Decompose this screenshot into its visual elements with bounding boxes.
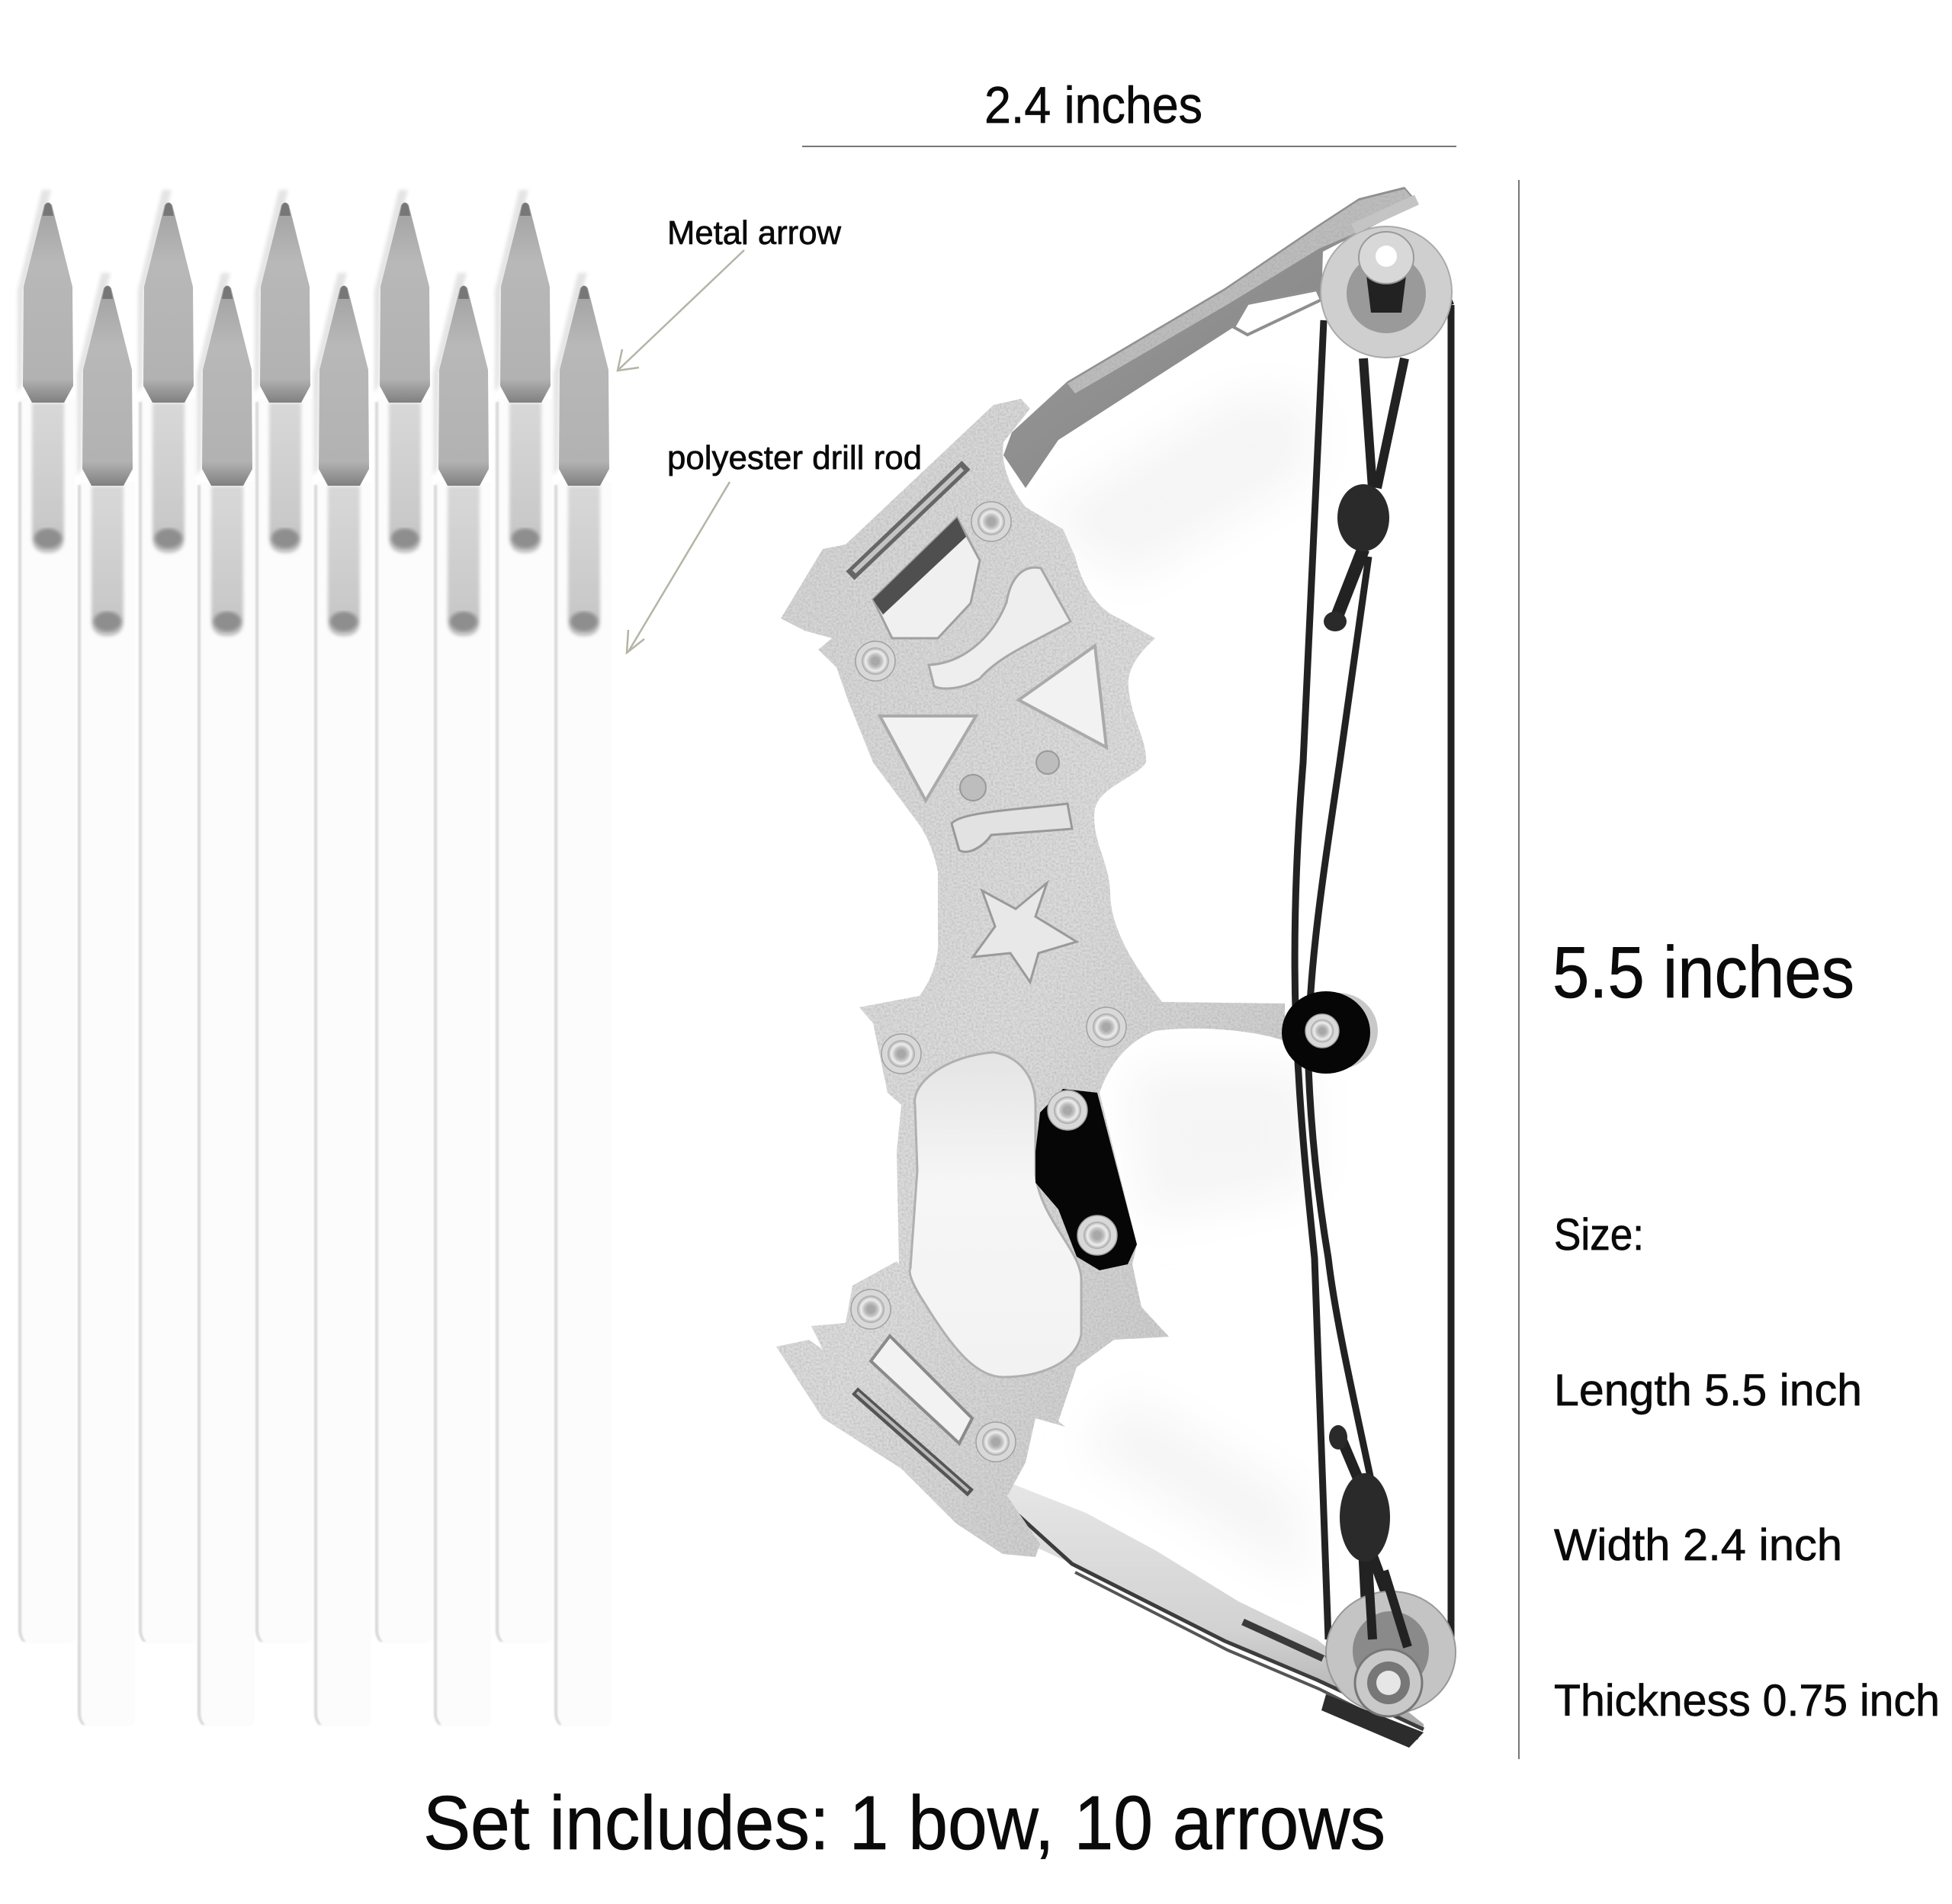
size specification list: Length 5.5 inch [1554, 1366, 1862, 1415]
cable guard arm end: silver disc [1299, 993, 1378, 1069]
top pulley [1321, 200, 1452, 358]
mini compound bow [776, 187, 1456, 1748]
label: polyester drill rod: polyester drill rod [667, 439, 922, 477]
lower limb [1006, 1483, 1424, 1748]
lower groove [855, 1391, 971, 1493]
set contents caption: Set includes: 1 bow, 10 arrows [423, 1780, 1385, 1866]
cable guard: black disc [1282, 991, 1370, 1074]
bottom pulley [1326, 1563, 1456, 1716]
cable guard bolt [1305, 1014, 1339, 1048]
label: metal arrow: Metal arrow [667, 214, 841, 252]
star cutout [973, 883, 1077, 982]
strings [1295, 305, 1451, 1642]
string knots [1324, 484, 1390, 1562]
size specification list: Thickness 0.75 inch [1554, 1676, 1940, 1726]
bar slot [952, 804, 1072, 852]
callout arrow: polyester drill rod [627, 482, 730, 653]
arrow set: ten arrows [18, 190, 612, 1726]
size specification list: Width 2.4 inch [1554, 1520, 1842, 1570]
upper slot [873, 518, 980, 638]
callout arrow: metal arrow [618, 250, 744, 371]
height dimension line [1518, 180, 1520, 1759]
back row arrows [18, 190, 553, 1643]
soft paper shading [1037, 397, 1312, 1586]
size specification list: Size: [1554, 1210, 1644, 1260]
upper groove [850, 465, 966, 576]
curved opening [929, 567, 1071, 689]
size specification list [1554, 1210, 1940, 1726]
left triangle opening [880, 716, 976, 801]
grip opening [910, 1052, 1081, 1377]
front row arrows [77, 273, 612, 1726]
upper limb [1003, 187, 1418, 488]
lower slot [871, 1336, 972, 1443]
width dimension line [802, 146, 1456, 147]
right triangle opening [1019, 646, 1106, 747]
height dimension label: 5.5 inches [1552, 932, 1854, 1013]
width dimension label: 2.4 inches [984, 76, 1202, 134]
frame bolts [851, 502, 1126, 1462]
black grip plate [1035, 1089, 1137, 1270]
riser frame [776, 399, 1285, 1557]
round holes [960, 751, 1059, 801]
